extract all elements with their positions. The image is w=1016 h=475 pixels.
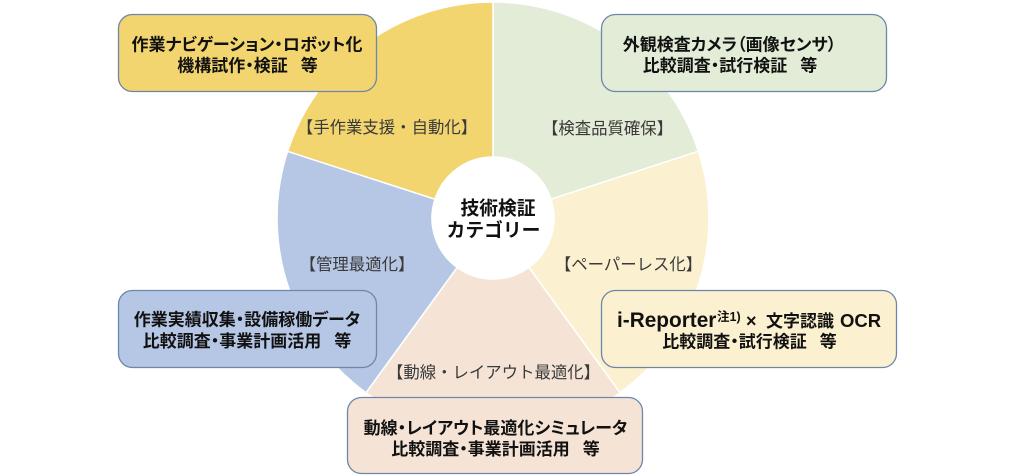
callout: i-Reporter OCR: × xyxy=(746,311,757,331)
donut chart xyxy=(277,2,709,434)
segment: manual work support xyxy=(288,2,493,199)
callout: work data collection: 比較調査・事業計画活用 等 xyxy=(143,331,351,351)
center label: 技術検証 xyxy=(460,196,536,218)
callout: appearance inspection camera xyxy=(602,14,886,92)
callout: appearance inspection camera: 外観検査カメラ（画像センサ） xyxy=(623,34,836,54)
callout: work data collection: 作業実績収集・設備稼働データ xyxy=(134,310,360,330)
callout: work navigation xyxy=(118,14,376,92)
segment: layout optimisation xyxy=(366,267,620,434)
callout: layout simulator xyxy=(348,398,642,474)
center label: カテゴリー xyxy=(447,218,540,240)
center label xyxy=(447,196,540,240)
callout: i-Reporter OCR: i-Reporter xyxy=(617,309,716,332)
segment: inspection quality xyxy=(493,2,698,199)
callout: i-Reporter OCR: 文字認識 xyxy=(766,312,834,331)
callout: i-Reporter OCR: 比較調査・試行検証 等 xyxy=(662,332,837,352)
label: layout optimisation: 【動線・レイアウト最適化】 xyxy=(387,364,600,382)
label: paperless: 【ペーパーレス化】 xyxy=(555,256,702,274)
segment: management optimisation xyxy=(277,151,457,393)
callout: work data collection xyxy=(118,290,376,368)
callout: layout simulator: 比較調査・事業計画活用 等 xyxy=(391,439,600,459)
callout: i-Reporter OCR: OCR xyxy=(840,310,881,331)
segment: paperless xyxy=(529,151,709,393)
label: manual work support: 【手作業支援・自動化】 xyxy=(297,119,477,137)
callout: layout simulator: 動線・レイアウト最適化シミュレータ xyxy=(364,419,627,438)
label: inspection quality: 【検査品質確保】 xyxy=(542,120,673,138)
callout: i-Reporter OCR: 注1) xyxy=(717,309,741,324)
label: management optimisation: 【管理最適化】 xyxy=(300,256,414,274)
callout: appearance inspection camera: 比較調査・試行検証 等 xyxy=(643,56,817,76)
callout: work navigation: 機構試作・検証 等 xyxy=(177,56,318,76)
callout: work navigation: 作業ナビゲーション・ロボット化 xyxy=(132,34,362,54)
callout: i-Reporter OCR xyxy=(602,290,896,368)
